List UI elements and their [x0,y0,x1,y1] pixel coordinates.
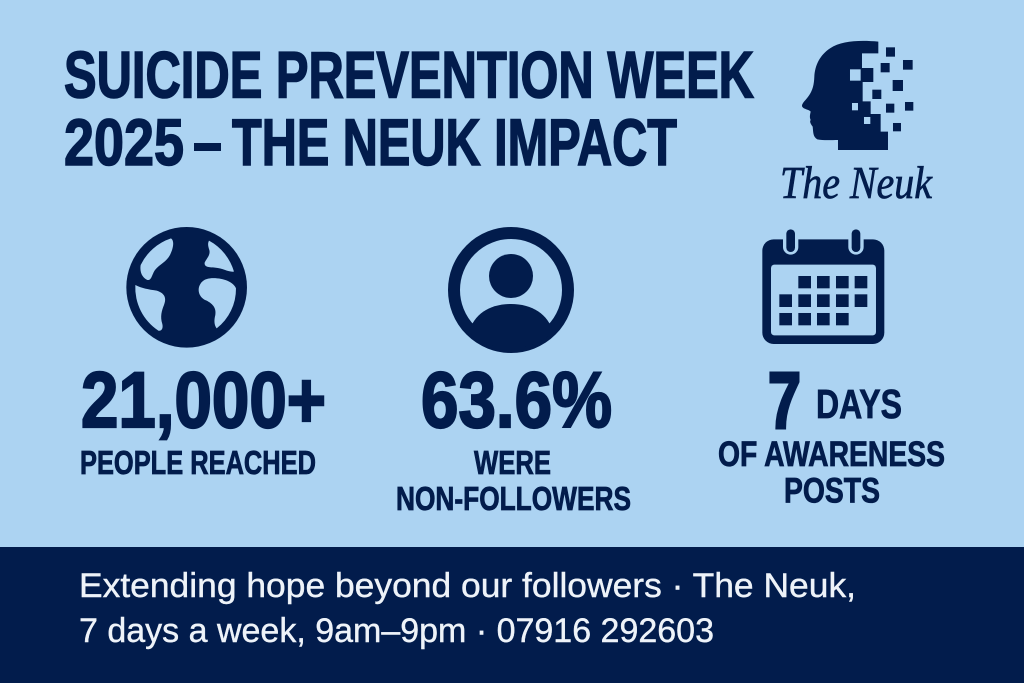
footer text [79,567,856,650]
label [396,444,631,517]
number: 7 [768,356,801,445]
number: DAYS [816,381,902,427]
stat: people reached [80,227,326,481]
logo: The Neuk [780,41,933,208]
stat: non-followers [396,233,631,517]
footer text: Extending hope beyond our followers · The Neuk, [79,567,856,605]
title: 2025 [64,105,184,179]
logo wordmark: The Neuk [780,157,933,208]
footer band [0,547,1024,683]
label [718,435,945,510]
icon: calendar [762,227,884,344]
number: 63.6% [421,355,612,444]
number [768,356,902,445]
icon: pixelated head [802,41,913,150]
icon: globe [126,227,247,348]
stat: days of awareness [718,227,945,510]
icon: person in circle [454,233,568,348]
title: THE NEUK IMPACT [232,105,677,179]
label: NON-FOLLOWERS [396,480,631,517]
label: WERE [474,444,551,481]
number: 21,000+ [81,355,326,444]
label: PEOPLE REACHED [80,444,316,481]
label: OF AWARENESS [718,435,945,474]
title [64,38,754,179]
footer text: 7 days a week, 9am–9pm · 07916 292603 [79,612,714,650]
title: SUICIDE PREVENTION WEEK [64,38,754,112]
label: POSTS [784,472,880,510]
